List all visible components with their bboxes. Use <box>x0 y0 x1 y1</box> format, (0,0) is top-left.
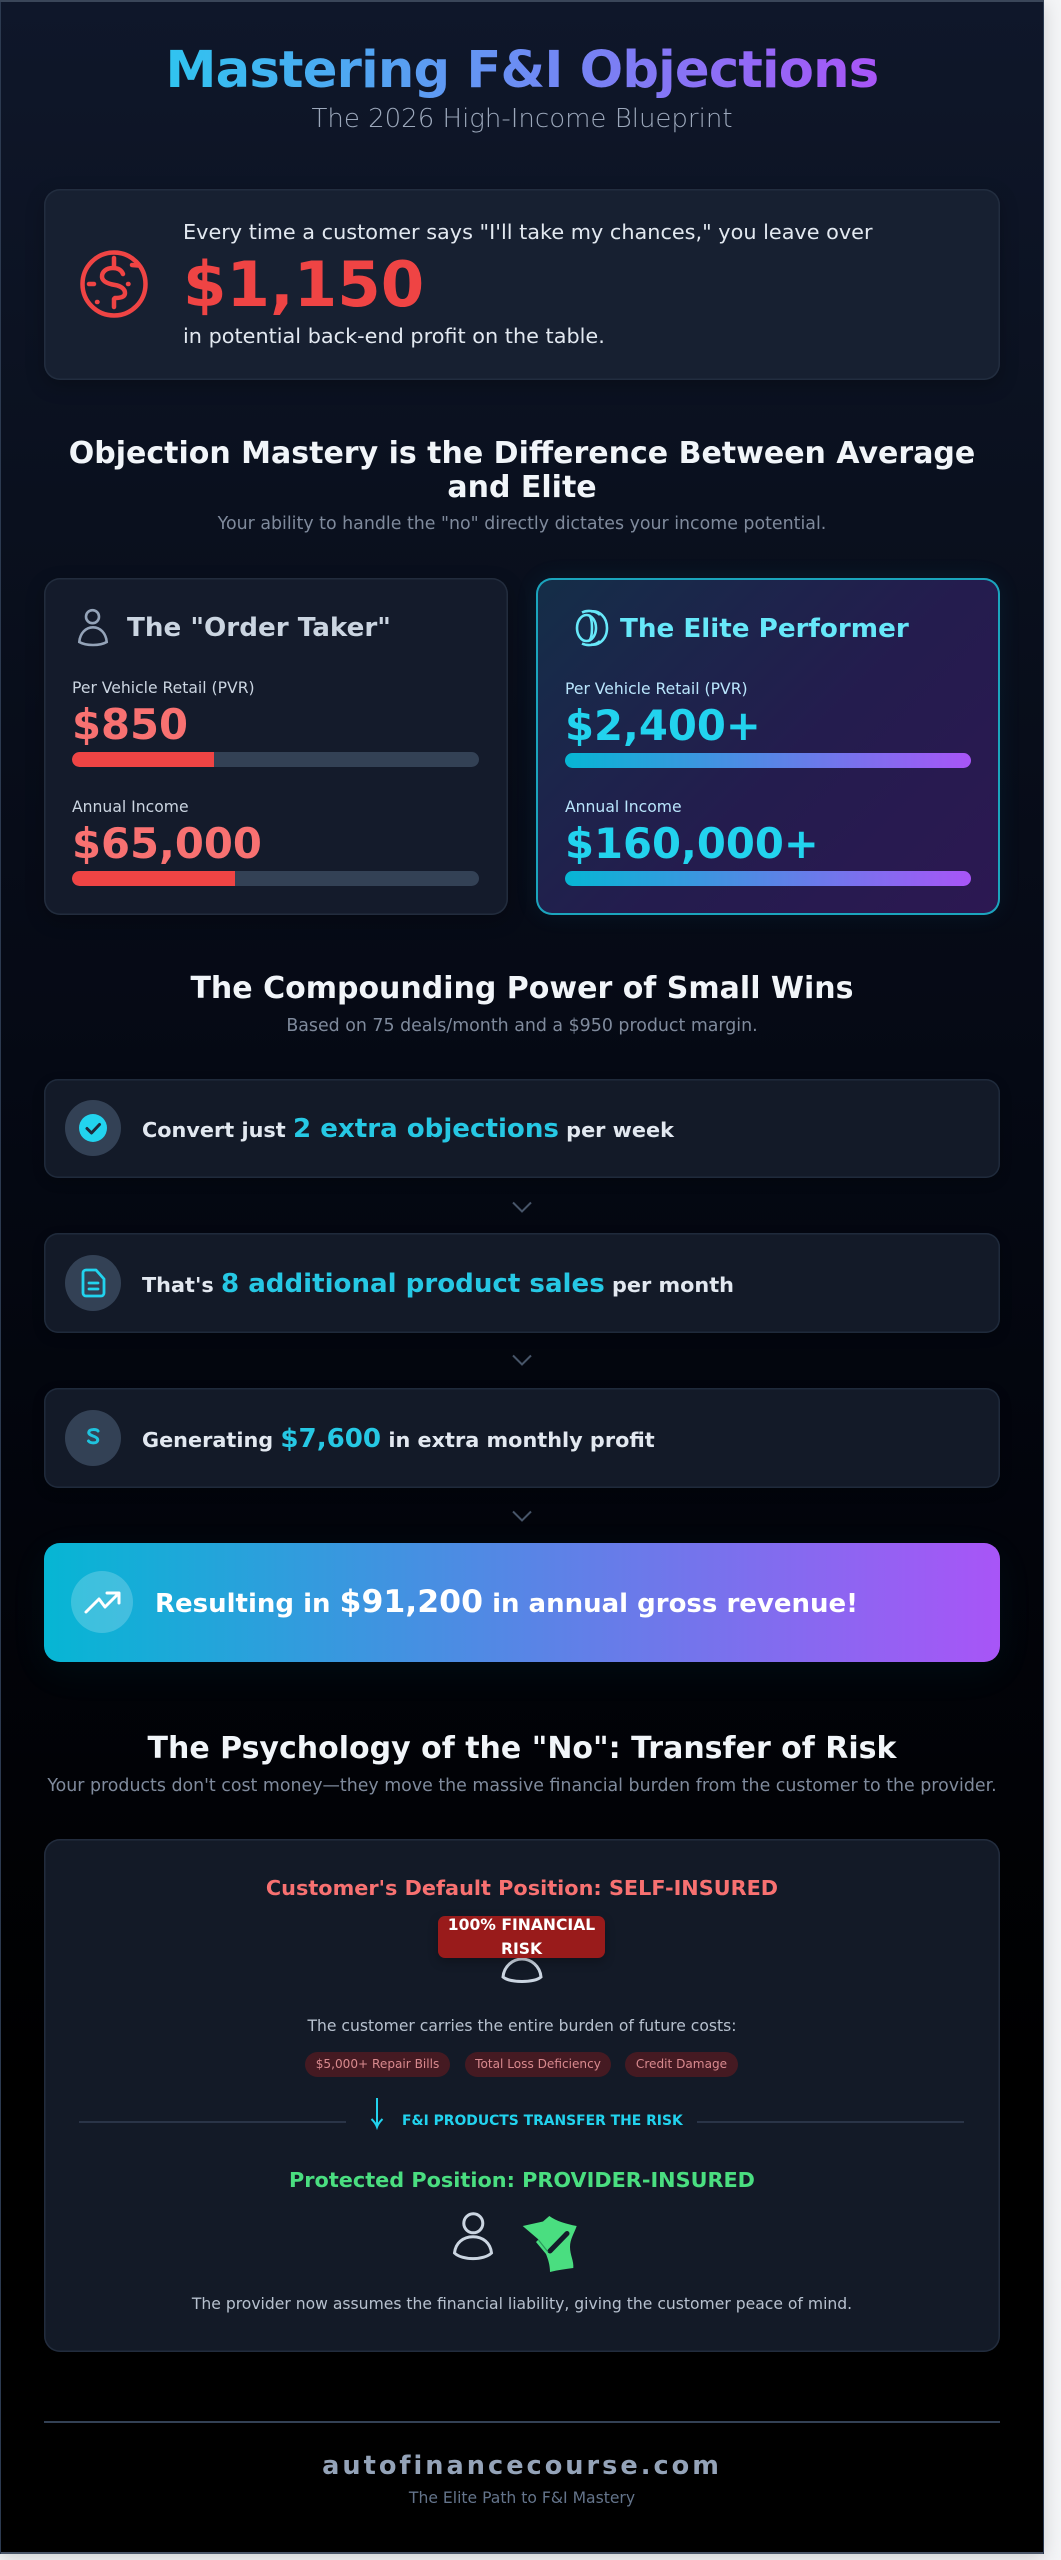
tag: total loss <box>465 2052 611 2077</box>
heading: provider-insured: Protected Position: PROVIDER-INSURED <box>289 2168 755 2192</box>
arrow: chevron <box>512 1354 532 1366</box>
value: pvr: $2,400+ <box>565 700 761 750</box>
step 1 <box>44 1079 1000 1178</box>
heading: objection mastery: and Elite <box>447 470 597 505</box>
arrow: down <box>370 2098 384 2130</box>
heading: objection mastery <box>69 436 975 505</box>
panel: order taker <box>44 578 508 915</box>
tag: credit damage <box>625 2052 738 2077</box>
badge: financial risk: 100% FINANCIAL <box>448 1916 595 1934</box>
icon: check circle <box>65 1100 121 1156</box>
label: transfer: F&I PRODUCTS TRANSFER THE RISK <box>402 2113 683 2129</box>
icon: person <box>452 2212 494 2260</box>
icon: elite badge <box>576 610 608 646</box>
icon: trending up <box>71 1571 133 1633</box>
heading: order taker: The "Order Taker" <box>127 612 391 642</box>
text: result: Resulting in $91,200 in annual gross revenue! <box>155 1584 858 1620</box>
panel: transfer of risk <box>44 1839 1000 2352</box>
subheading: objection mastery: Your ability to handle the "no" directly dictates your income potential. <box>218 514 826 534</box>
value: pvr: $850 <box>72 700 188 748</box>
text: step 2: That's 8 additional product sales per month <box>142 1268 734 1298</box>
icon: person <box>78 608 108 646</box>
footer: site name: autofinancecourse.com <box>322 2451 722 2481</box>
icon: dollar <box>65 1410 121 1466</box>
bar: pvr <box>72 752 479 767</box>
heading: psychology: The Psychology of the "No": Transfer of Risk <box>148 1731 896 1766</box>
text: burden: The customer carries the entire burden of future costs: <box>307 2017 737 2035</box>
text: step 1: Convert just 2 extra objections per week <box>142 1114 674 1144</box>
step 2 <box>44 1233 1000 1333</box>
tag: total loss: Total Loss Deficiency <box>475 2057 601 2071</box>
arrow: chevron <box>512 1202 532 1213</box>
label: pvr: Per Vehicle Retail (PVR) <box>72 679 255 697</box>
arrow: chevron <box>512 1510 532 1522</box>
result banner <box>44 1543 1000 1662</box>
icon: document <box>65 1255 121 1311</box>
text: provider assumes: The provider now assumes the financial liability, giving the customer peace of mind. <box>192 2295 852 2313</box>
value: annual income: $160,000+ <box>565 818 819 868</box>
bar: annual income <box>72 871 479 886</box>
footer: tagline: The Elite Path to F&I Mastery <box>409 2489 635 2507</box>
subheading: compounding: Based on 75 deals/month and a $950 product margin. <box>286 1016 758 1036</box>
text: step 3: Generating $7,600 in extra monthly profit <box>142 1424 655 1454</box>
badge: financial risk <box>438 1916 605 1958</box>
panel: lost profit callout <box>44 189 1000 380</box>
bar: annual income <box>565 871 971 886</box>
title: Mastering F&I Objections <box>166 40 878 100</box>
text: lead-in: Every time a customer says "I'll take my chances," you leave over <box>183 220 873 244</box>
step 3 <box>44 1388 1000 1488</box>
text: big number: $1,150 <box>183 248 424 321</box>
heading: elite performer: The Elite Performer <box>620 614 909 644</box>
label: pvr: Per Vehicle Retail (PVR) <box>565 680 748 698</box>
icon: dollar coin <box>80 250 148 318</box>
bar: pvr <box>565 753 971 768</box>
subheading: psychology: Your products don't cost money—they move the massive financial burden from the customer to the provider. <box>47 1776 997 1796</box>
tag: credit damage: Credit Damage <box>636 2057 727 2071</box>
heading: self-insured: Customer's Default Position: SELF-INSURED <box>266 1876 778 1900</box>
icon: shield check <box>522 2216 577 2272</box>
label: annual income: Annual Income <box>72 798 189 816</box>
tag: repair bills: $5,000+ Repair Bills <box>316 2057 439 2071</box>
tag: repair bills <box>305 2052 450 2077</box>
heading: objection mastery: Objection Mastery is the Difference Between Average <box>69 436 975 470</box>
label: annual income: Annual Income <box>565 798 682 816</box>
icon: person body under badge <box>501 1958 543 1983</box>
panel: elite performer <box>536 578 1000 915</box>
value: annual income: $65,000 <box>72 818 262 868</box>
badge: financial risk: RISK <box>501 1940 542 1958</box>
text: trailing line: in potential back-end profit on the table. <box>183 324 605 348</box>
heading: compounding: The Compounding Power of Small Wins <box>190 971 854 1006</box>
subtitle: The 2026 High-Income Blueprint <box>311 104 733 134</box>
